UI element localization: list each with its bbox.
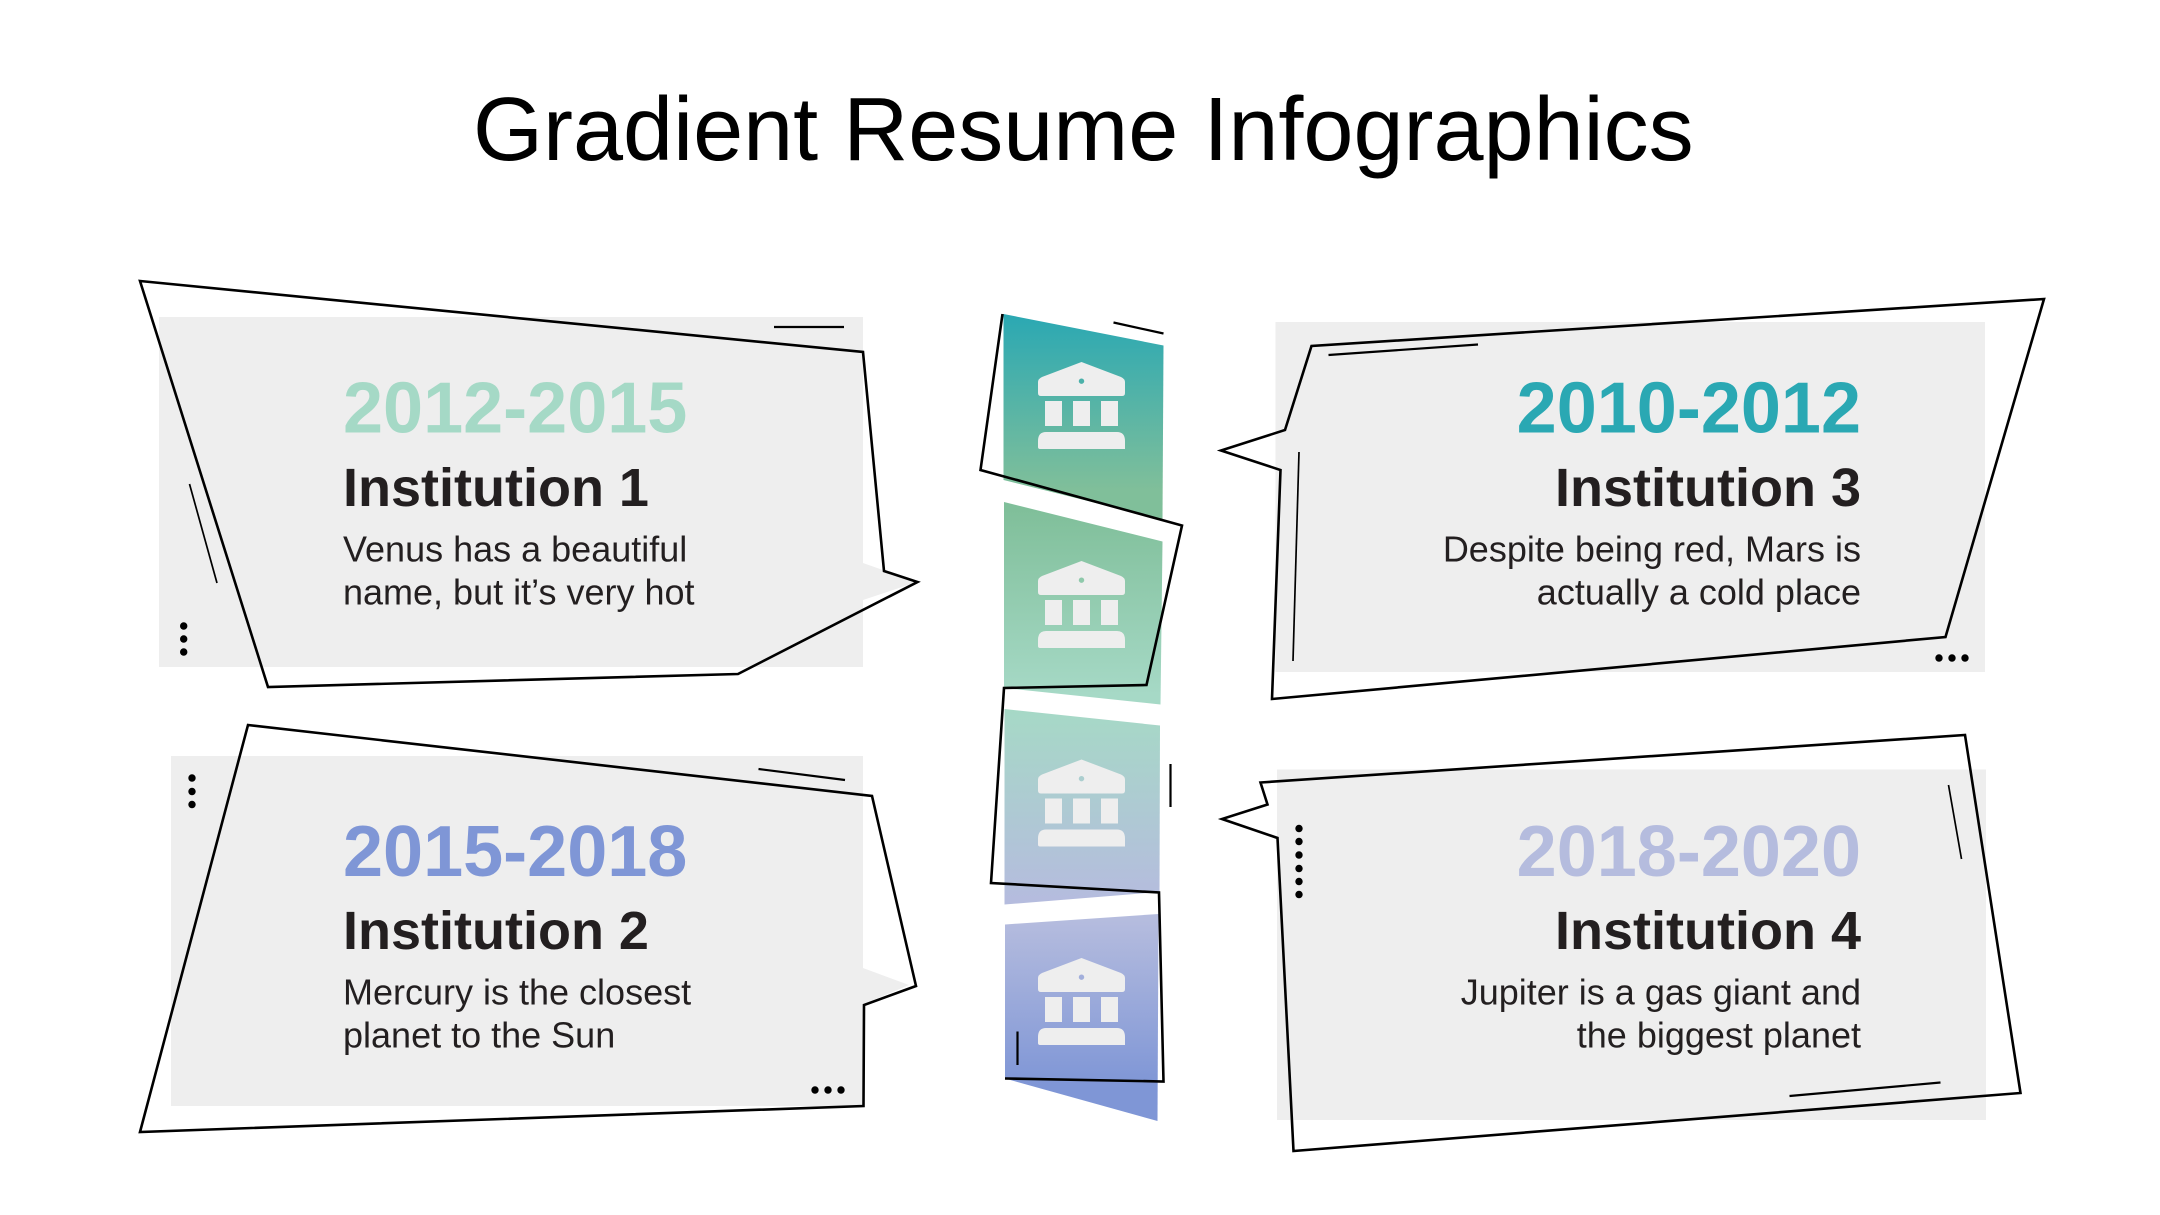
speech bubble outline [1222, 735, 2020, 1151]
segment 3 [1004, 709, 1160, 904]
decorative line bottom [1790, 1082, 1940, 1096]
decorative line top [774, 326, 844, 328]
speech bubble outline [140, 281, 918, 687]
panel background [1276, 322, 1985, 672]
speech bubble outline [1221, 299, 2044, 699]
institution name: Institution 1 [343, 458, 649, 518]
icon: institution building 4 [1038, 958, 1125, 1045]
panel: institution 4 [1222, 735, 2020, 1151]
year: 2015-2018 [343, 812, 687, 892]
accent line bottom [1016, 1032, 1019, 1065]
year: 2010-2012 [1517, 368, 1861, 448]
description: actually a cold place [1537, 572, 1861, 612]
title: Gradient Resume Infographics [473, 80, 1694, 180]
panel background [171, 756, 909, 1106]
description: Despite being red, Mars is [1443, 528, 1861, 570]
institution name: Institution 3 [1555, 458, 1861, 518]
decorative line left [1293, 452, 1299, 661]
panel: institution 2 [140, 725, 916, 1132]
decorative line top [1328, 344, 1478, 355]
year: 2018-2020 [1517, 812, 1861, 892]
description: Jupiter is a gas giant and [1461, 972, 1861, 1012]
dots [1935, 654, 1969, 662]
year: 2012-2015 [343, 368, 687, 448]
panel background [1277, 770, 1986, 1120]
segment 4 [1005, 914, 1158, 1121]
description: the biggest planet [1577, 1014, 1861, 1056]
institution name: Institution 4 [1555, 901, 1861, 961]
accent line top [1114, 322, 1164, 334]
segment 1 [1004, 314, 1164, 520]
dots [180, 622, 187, 656]
panel background [159, 317, 917, 667]
panel: institution 3 [1221, 299, 2044, 699]
decorative line [190, 484, 217, 583]
icon: institution building 1 [1038, 362, 1125, 449]
accent line right [1169, 764, 1172, 807]
speech bubble outline [140, 725, 916, 1132]
panel: institution 1 [140, 281, 918, 687]
decorative line top [758, 769, 845, 780]
institution name: Institution 2 [343, 901, 649, 961]
dots [1295, 825, 1303, 898]
decorative line right [1948, 785, 1962, 859]
description: planet to the Sun [343, 1014, 615, 1056]
description: Venus has a beautiful [343, 528, 687, 570]
icon: institution building 3 [1038, 760, 1125, 846]
central timeline strip [980, 314, 1182, 1121]
dots horizontal [811, 1086, 845, 1094]
segment 2 [1004, 502, 1162, 704]
description: name, but it’s very hot [343, 572, 695, 612]
strip outline [980, 314, 1182, 1082]
description: Mercury is the closest [343, 972, 691, 1012]
icon: institution building 2 [1038, 561, 1125, 648]
dots vertical [188, 774, 196, 808]
